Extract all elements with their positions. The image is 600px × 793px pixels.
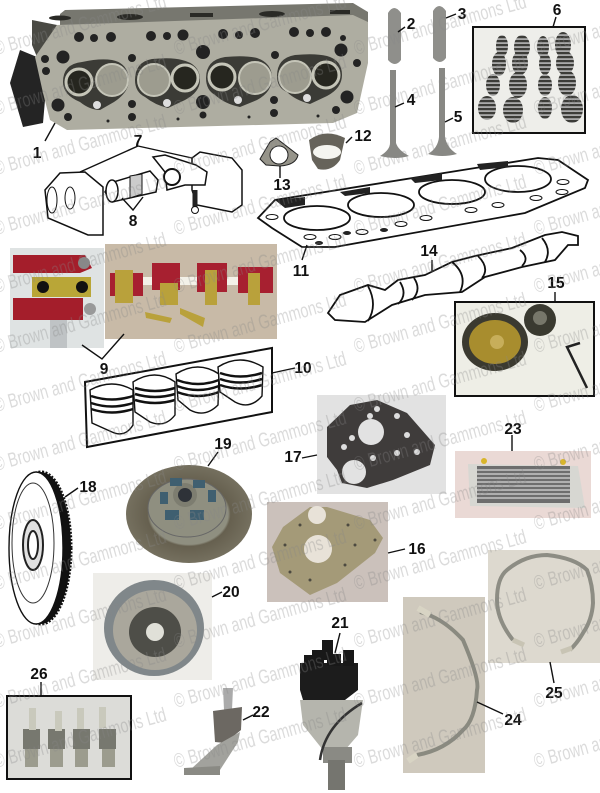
- part 21: distributor: 21: [331, 615, 349, 632]
- part 2 and 4: inlet valve guide and valve: 4: [407, 92, 416, 109]
- part 18: flywheel drawing: [9, 472, 97, 624]
- part 7 and 8: rocker assembly drawing: 8: [129, 213, 138, 230]
- watermark: © Brown and Gammons Ltd: [171, 171, 349, 240]
- part 10: pistons box: 10: [294, 360, 312, 377]
- watermark: © Brown and Gammons Ltd: [351, 407, 529, 476]
- watermark: © Brown and Gammons Ltd: [351, 51, 529, 120]
- watermark: © Brown and Gammons Ltd: [171, 289, 349, 358]
- part 13: gasket: 13: [273, 177, 291, 194]
- part 19: clutch plate: 19: [214, 436, 232, 453]
- part 24: oil pipe photo: 24: [504, 712, 522, 729]
- part 23: oil cooler photo: 23: [504, 421, 522, 438]
- part 24: oil pipe photo: [403, 597, 522, 773]
- part 23: oil cooler photo: [455, 421, 591, 518]
- part 16: adapter plate photo: [267, 502, 426, 602]
- part 12: bush: 12: [354, 128, 372, 145]
- part 12: bush: [309, 128, 372, 170]
- watermark: © Brown and Gammons Ltd: [351, 348, 529, 417]
- part 11: head gasket: [258, 158, 588, 280]
- watermark: © Brown and Gammons Ltd: [351, 111, 529, 180]
- part 14: camshaft: [328, 232, 578, 322]
- part 25: braided hose photo: [488, 550, 600, 702]
- part 21: distributor: [300, 615, 363, 790]
- watermark: © Brown and Gammons Ltd: [171, 466, 349, 535]
- part 18: flywheel drawing: 18: [79, 479, 97, 496]
- part 22: distributor clamp: 22: [252, 704, 270, 721]
- watermark: © Brown and Gammons Ltd: [171, 111, 349, 180]
- part 1: cylinder head: [10, 3, 368, 162]
- part 7 and 8: rocker assembly drawing: [45, 133, 242, 235]
- part 13: gasket: [260, 138, 298, 194]
- part 26: spark plugs box: [7, 666, 131, 779]
- part 15: timing gear kit photo: 15: [547, 275, 565, 292]
- part 6: valve springs photo: [473, 2, 585, 133]
- watermark: © Brown and Gammons Ltd: [171, 51, 349, 120]
- watermark: © Brown and Gammons Ltd: [171, 526, 349, 595]
- part 11: head gasket: 11: [293, 263, 310, 280]
- part 22: distributor clamp: [184, 688, 270, 775]
- part 3 and 5: exhaust valve guide and valve: 3: [458, 6, 467, 23]
- part 10: pistons box: [85, 348, 312, 447]
- part 3 and 5: exhaust valve guide and valve: 5: [454, 109, 463, 126]
- watermark: © Brown and Gammons Ltd: [351, 466, 529, 535]
- part 1: cylinder head: 1: [33, 145, 42, 162]
- part 19: clutch plate: [126, 436, 252, 563]
- watermark: © Brown and Gammons Ltd: [351, 704, 529, 773]
- part 3 and 5: exhaust valve guide and valve: [428, 6, 467, 156]
- part 17: adapter plate photo: [284, 395, 446, 494]
- part 9: rocker kit photos: [10, 244, 277, 378]
- watermark: © Brown and Gammons Ltd: [171, 229, 349, 298]
- watermark: © Brown and Gammons Ltd: [171, 704, 349, 773]
- watermark: © Brown and Gammons Ltd: [171, 584, 349, 653]
- part 2 and 4: inlet valve guide and valve: [380, 8, 416, 158]
- part 7 and 8: rocker assembly drawing: 7: [134, 133, 142, 150]
- watermark: © Brown and Gammons Ltd: [171, 348, 349, 417]
- part 15: timing gear kit photo: [455, 275, 594, 396]
- watermark: © Brown and Gammons Ltd: [351, 289, 529, 358]
- watermark: © Brown and Gammons Ltd: [351, 584, 529, 653]
- watermark: © Brown and Gammons Ltd: [171, 644, 349, 713]
- part 2 and 4: inlet valve guide and valve: 2: [407, 16, 415, 33]
- watermark: © Brown and Gammons Ltd: [351, 644, 529, 713]
- watermark: © Brown and Gammons Ltd: [351, 526, 529, 595]
- part 20: clutch cover photo: 20: [222, 584, 240, 601]
- part 26: spark plugs box: 26: [30, 666, 48, 683]
- part 17: adapter plate photo: 17: [284, 449, 302, 466]
- watermark: © Brown and Gammons Ltd: [351, 229, 529, 298]
- watermark: © Brown and Gammons Ltd: [171, 407, 349, 476]
- part 6: valve springs photo: 6: [553, 2, 562, 19]
- part 20: clutch cover photo: [93, 573, 240, 680]
- watermark: © Brown and Gammons Ltd: [351, 171, 529, 240]
- part 16: adapter plate photo: 16: [408, 541, 426, 558]
- part 14: camshaft: 14: [420, 243, 438, 260]
- part 9: rocker kit photos: 9: [100, 361, 109, 378]
- part 25: braided hose photo: 25: [545, 685, 563, 702]
